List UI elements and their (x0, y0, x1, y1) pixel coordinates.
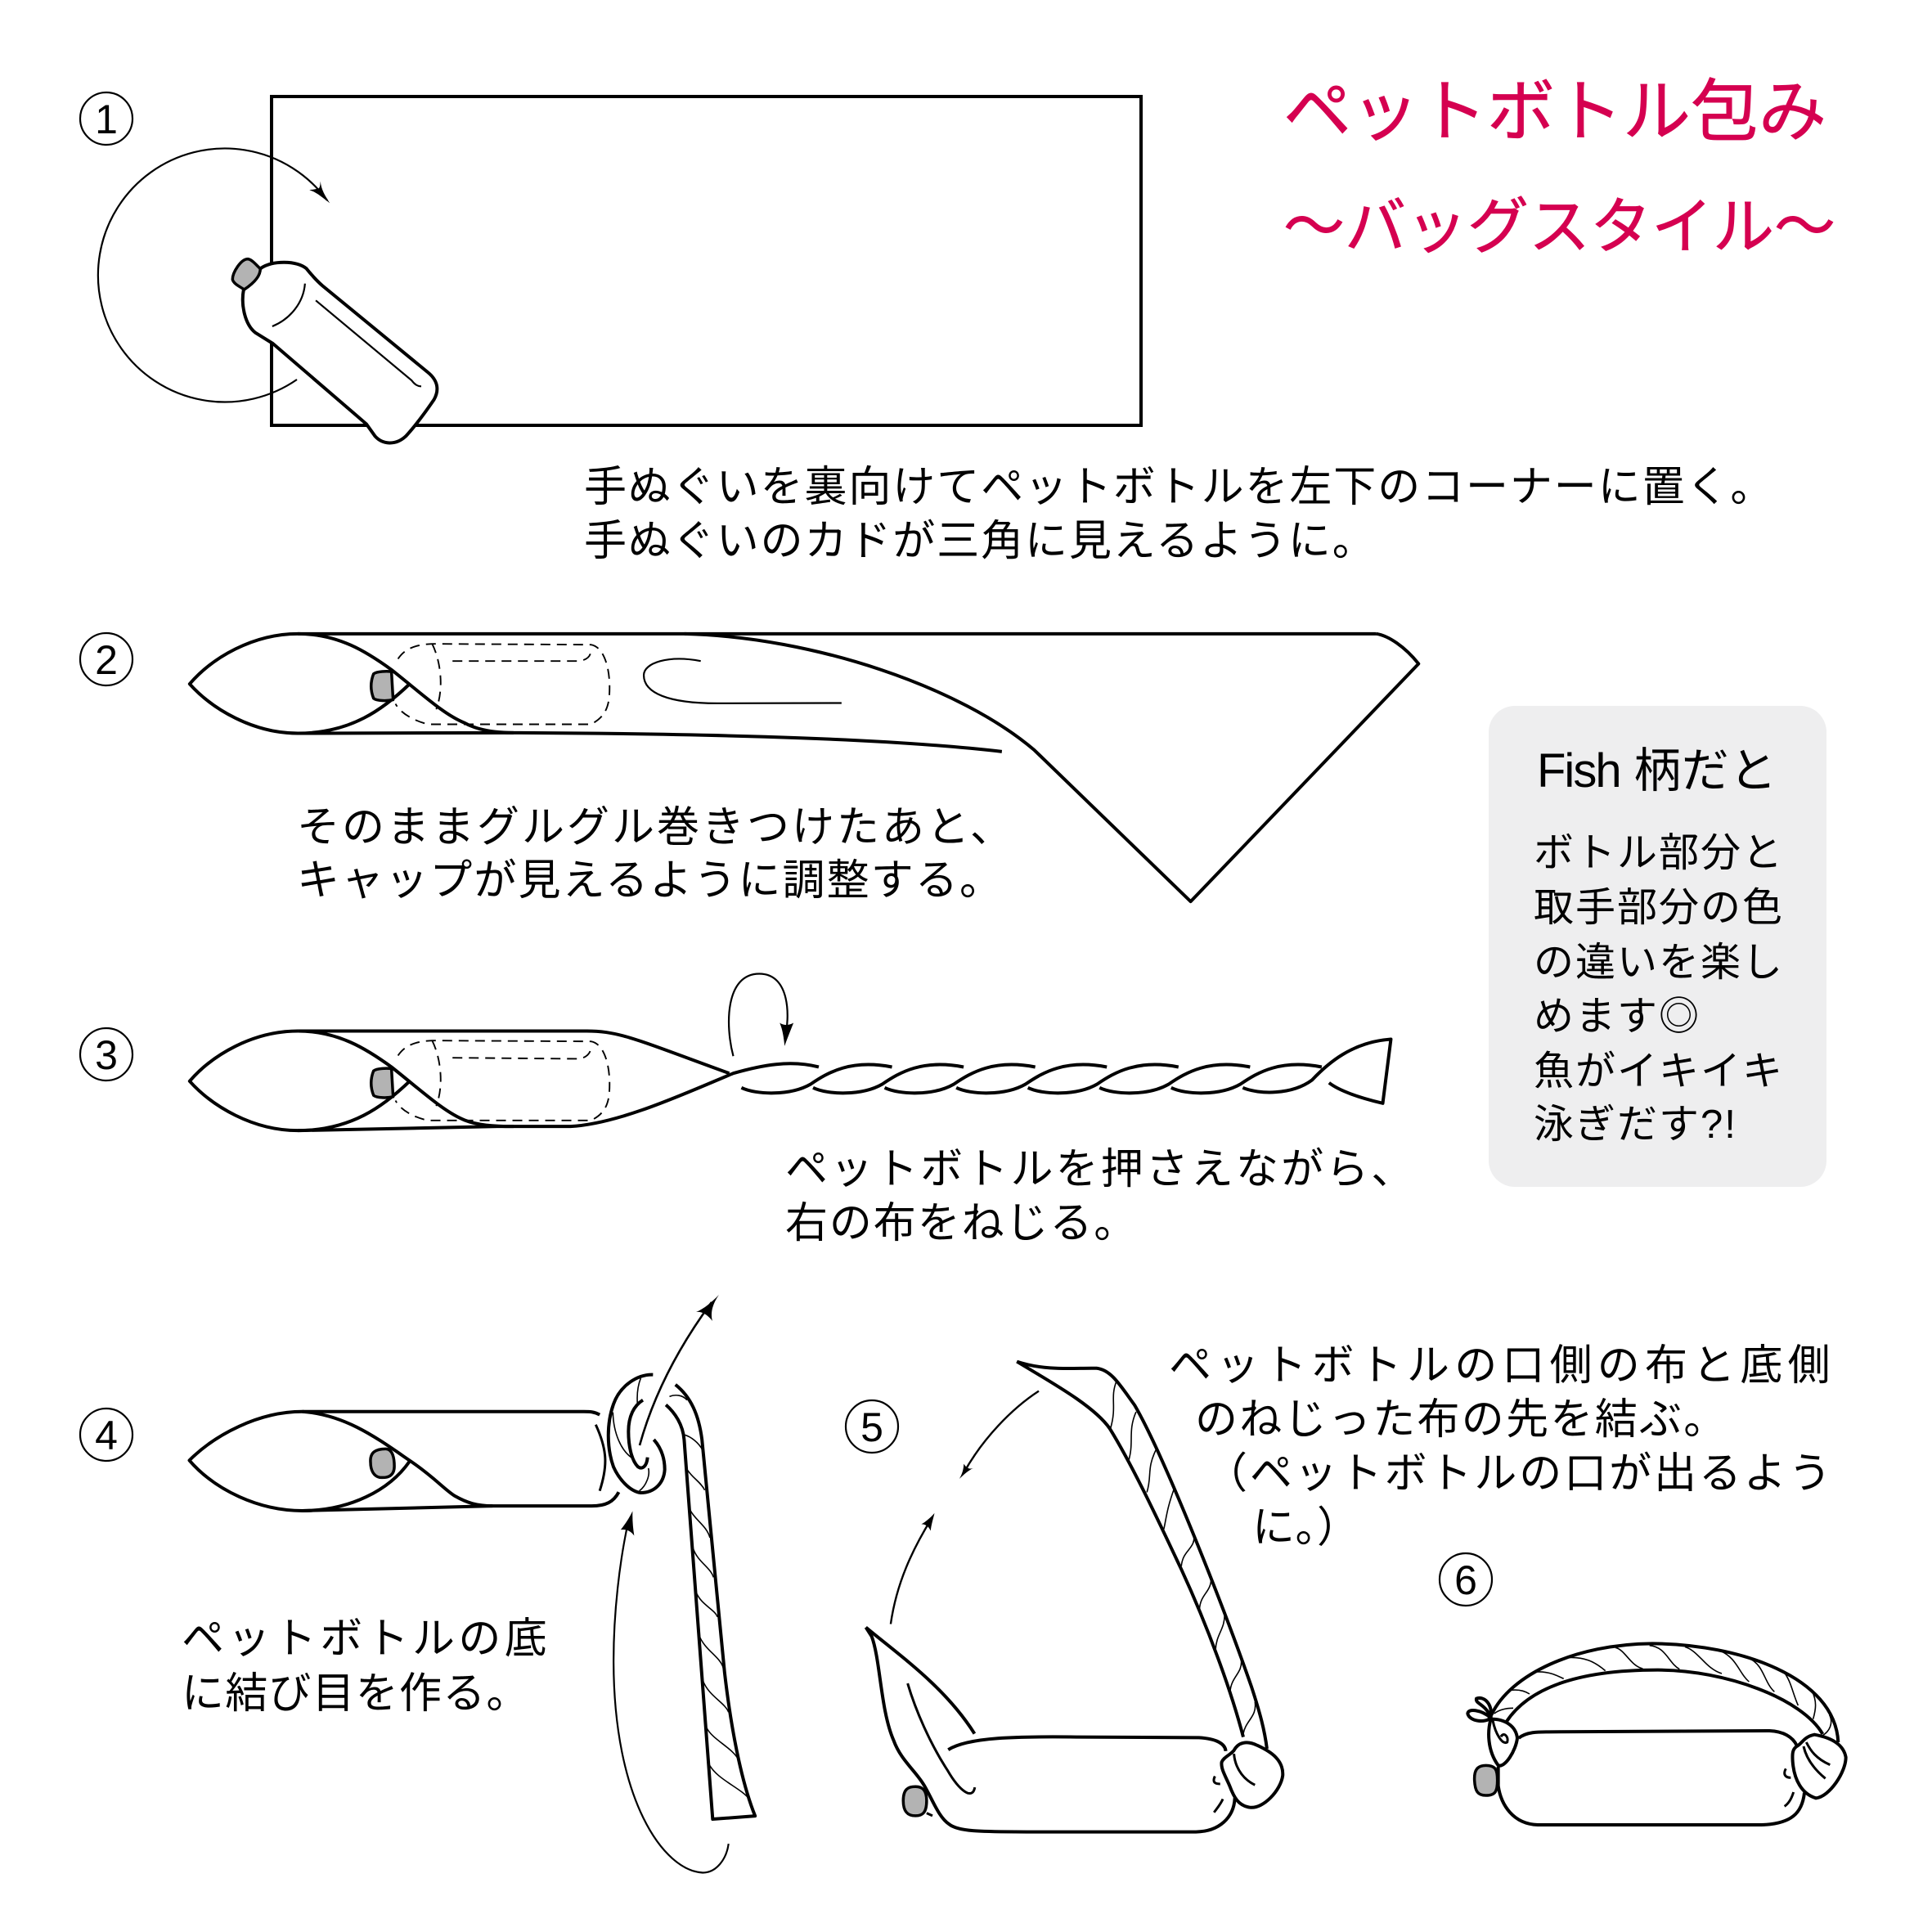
diagram: knot at bottle base (190, 1385, 755, 1872)
panel: Fish pattern note (1489, 706, 1826, 1187)
knot detail (609, 1375, 665, 1493)
title: 〜バッグスタイル〜 (1283, 192, 1835, 261)
note body: めます◎ (1534, 995, 1701, 1039)
number 2: 2 (95, 637, 118, 683)
number 4 (80, 1409, 133, 1461)
diagram: bottle rolled in cloth (190, 634, 1418, 901)
instruction text 5: （ペットボトルの口が出るよう (1205, 1450, 1834, 1498)
diagram: finished bag (1467, 1643, 1846, 1825)
diagram: twisted cloth (190, 973, 1391, 1130)
rotation arrow (98, 148, 330, 402)
number 3 (80, 1028, 133, 1081)
instruction text 5 (1169, 1342, 1835, 1552)
step 1 (80, 92, 1774, 565)
instruction text 3: 右の布をねじる。 (785, 1200, 1138, 1247)
note body: の違いを楽し (1534, 941, 1784, 985)
number 2 (80, 633, 133, 685)
cloth rectangle (272, 97, 1141, 425)
note body: 魚がイキイキ (1534, 1049, 1784, 1094)
instruction text 1: 手ぬぐいを裏向けてペットボトルを左下のコーナーに置く。 (584, 464, 1774, 511)
instruction text 4 (182, 1615, 550, 1718)
instruction text 2 (297, 804, 1015, 905)
icon: bottle (232, 259, 437, 443)
instruction text 5: に。） (1252, 1504, 1360, 1552)
step 6 (1440, 1553, 1846, 1825)
note body: 取手部分の色 (1534, 886, 1784, 930)
number 5: 5 (860, 1404, 883, 1450)
note body: ボトル部分と (1534, 831, 1784, 875)
number 1 (80, 92, 133, 145)
number 5 (846, 1400, 898, 1453)
instruction text 2: そのままグルグル巻きつけたあと、 (297, 804, 1015, 851)
number 6 (1440, 1553, 1492, 1606)
instruction text 4: に結び目を作る。 (182, 1670, 530, 1718)
instruction text 4: ペットボトルの底 (182, 1615, 550, 1663)
instruction text 1: 手ぬぐいのカドが三角に見えるように。 (584, 518, 1377, 565)
number 1: 1 (95, 97, 118, 142)
diagram: tying the two cloth ends (866, 1362, 1283, 1832)
note heading: Fish 柄だと (1537, 744, 1777, 798)
step 5 (846, 1342, 1835, 1832)
instruction text 2: キャップが見えるように調整する。 (297, 857, 1004, 905)
arrow: cloth pulled through knot (640, 1295, 719, 1445)
instruction text 1 (584, 464, 1774, 565)
note body (1534, 831, 1784, 1147)
number 3: 3 (95, 1032, 118, 1078)
step 3 (80, 973, 1416, 1247)
number 4: 4 (95, 1413, 118, 1458)
instruction text 5: ペットボトルの口側の布と底側 (1169, 1342, 1835, 1390)
note body: 泳ぎだす?! (1534, 1103, 1737, 1147)
instruction text 5: のねじった布の先を結ぶ。 (1195, 1396, 1728, 1444)
step 4 (80, 1295, 755, 1872)
instruction text 3 (785, 1146, 1416, 1247)
title: ペットボトル包み (1283, 74, 1826, 150)
instruction text 3: ペットボトルを押さえながら、 (785, 1146, 1416, 1193)
step 2 (80, 633, 1418, 905)
number 6: 6 (1454, 1557, 1477, 1603)
title (1283, 74, 1835, 261)
